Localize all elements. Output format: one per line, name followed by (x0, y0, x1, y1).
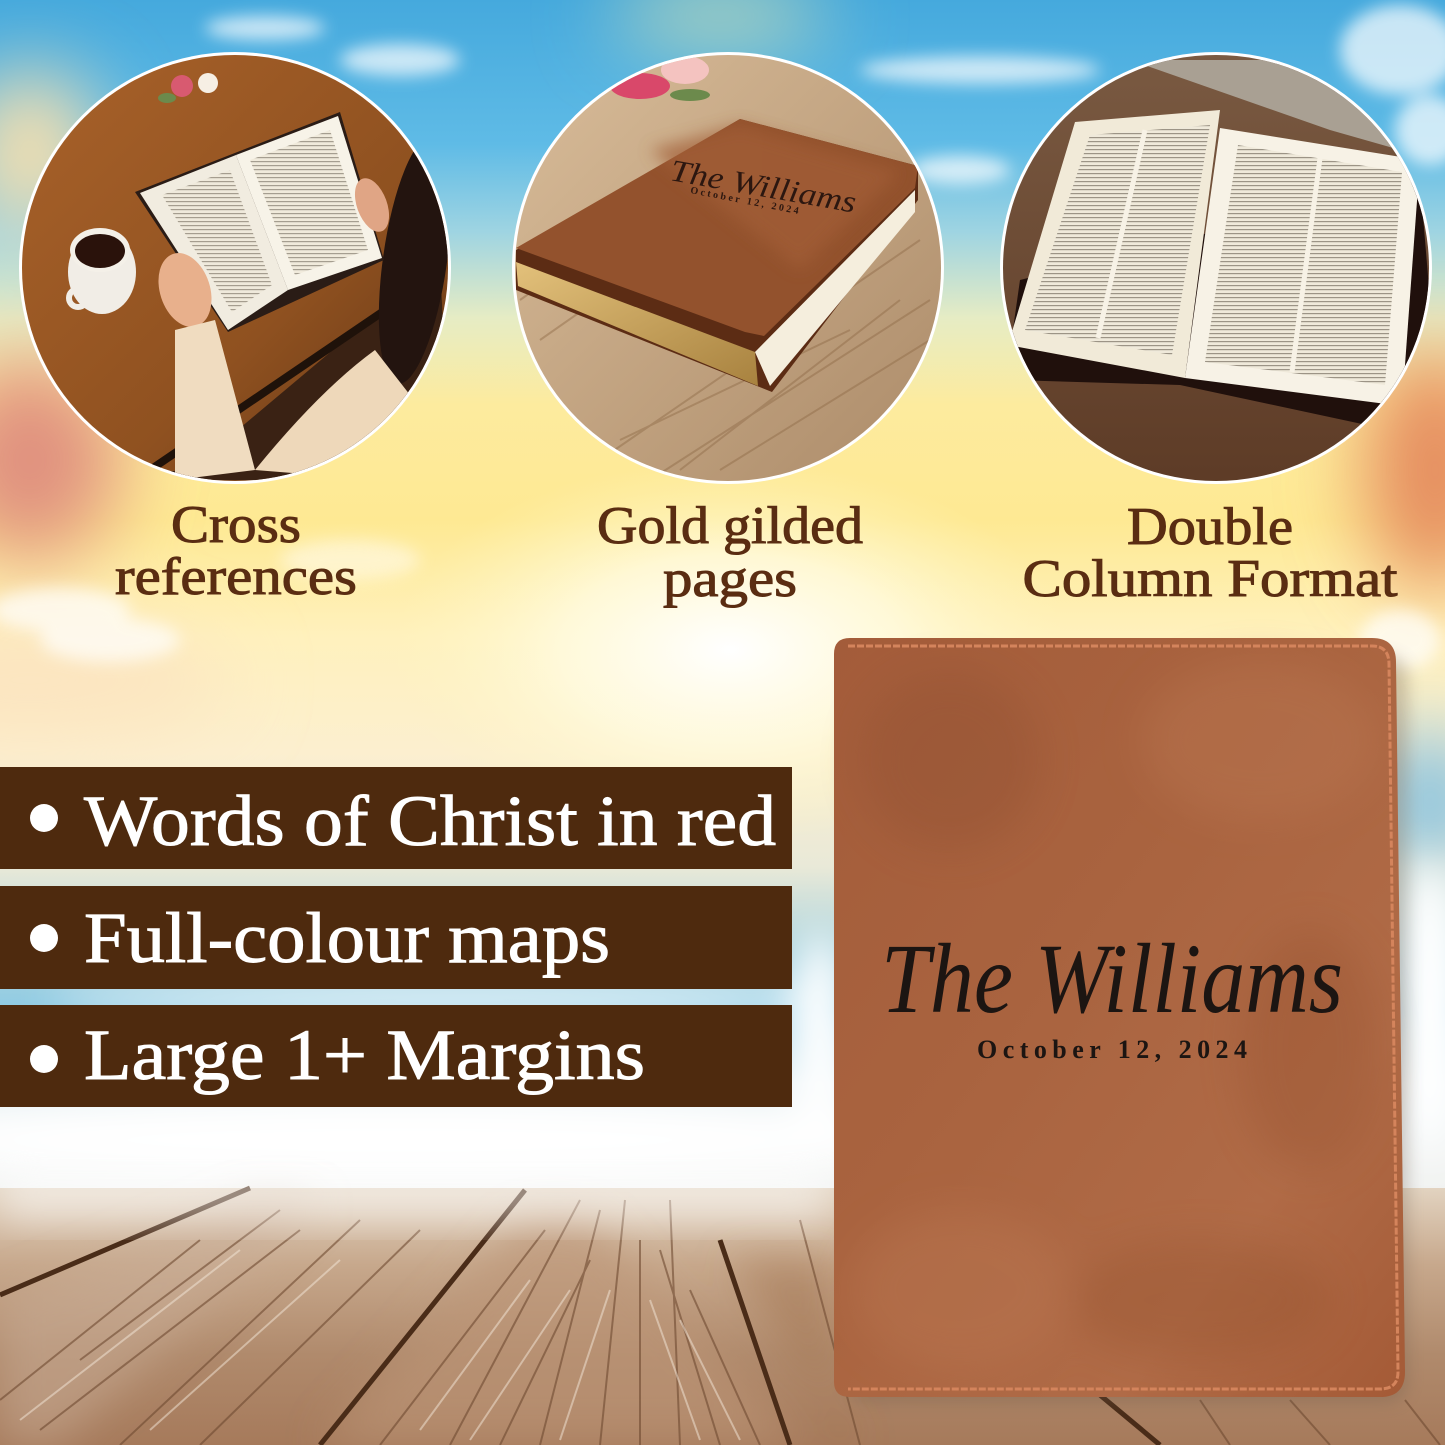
feature bar: full-colour maps: Full-colour maps (84, 898, 610, 978)
photo circle: cross references (19, 50, 464, 490)
photo circle: gold gilded pages: The Williams (668, 152, 859, 220)
caption: cross references: references (115, 548, 357, 606)
feature bar: words of Christ in red: Words of Christ in red (84, 781, 776, 861)
feature bar: words of Christ in red (0, 767, 792, 869)
caption: gold gilded pages: Gold gilded (597, 497, 863, 555)
feature bar: large margins: Large 1+ Margins (84, 1015, 645, 1095)
photo circle: double column format (1000, 50, 1432, 490)
wooden deck (0, 1170, 1445, 1445)
caption: double column format (1022, 498, 1398, 608)
photo circle: gold gilded pages (510, 50, 950, 490)
feature bar: full-colour maps (0, 886, 792, 989)
caption: double column format: Column Format (1022, 550, 1398, 608)
caption: cross references (115, 496, 357, 606)
cover title: The Williams (881, 923, 1343, 1034)
caption: double column format: Double (1127, 498, 1293, 556)
cover date: October 12, 2024 (977, 1035, 1247, 1064)
caption: gold gilded pages (597, 497, 863, 608)
caption: cross references: Cross (171, 496, 301, 554)
photo circle: gold gilded pages: October 12, 2024 (689, 185, 801, 217)
caption: gold gilded pages: pages (663, 550, 797, 608)
leather bible cover (834, 638, 1408, 1403)
feature bar: large margins (0, 1005, 792, 1107)
